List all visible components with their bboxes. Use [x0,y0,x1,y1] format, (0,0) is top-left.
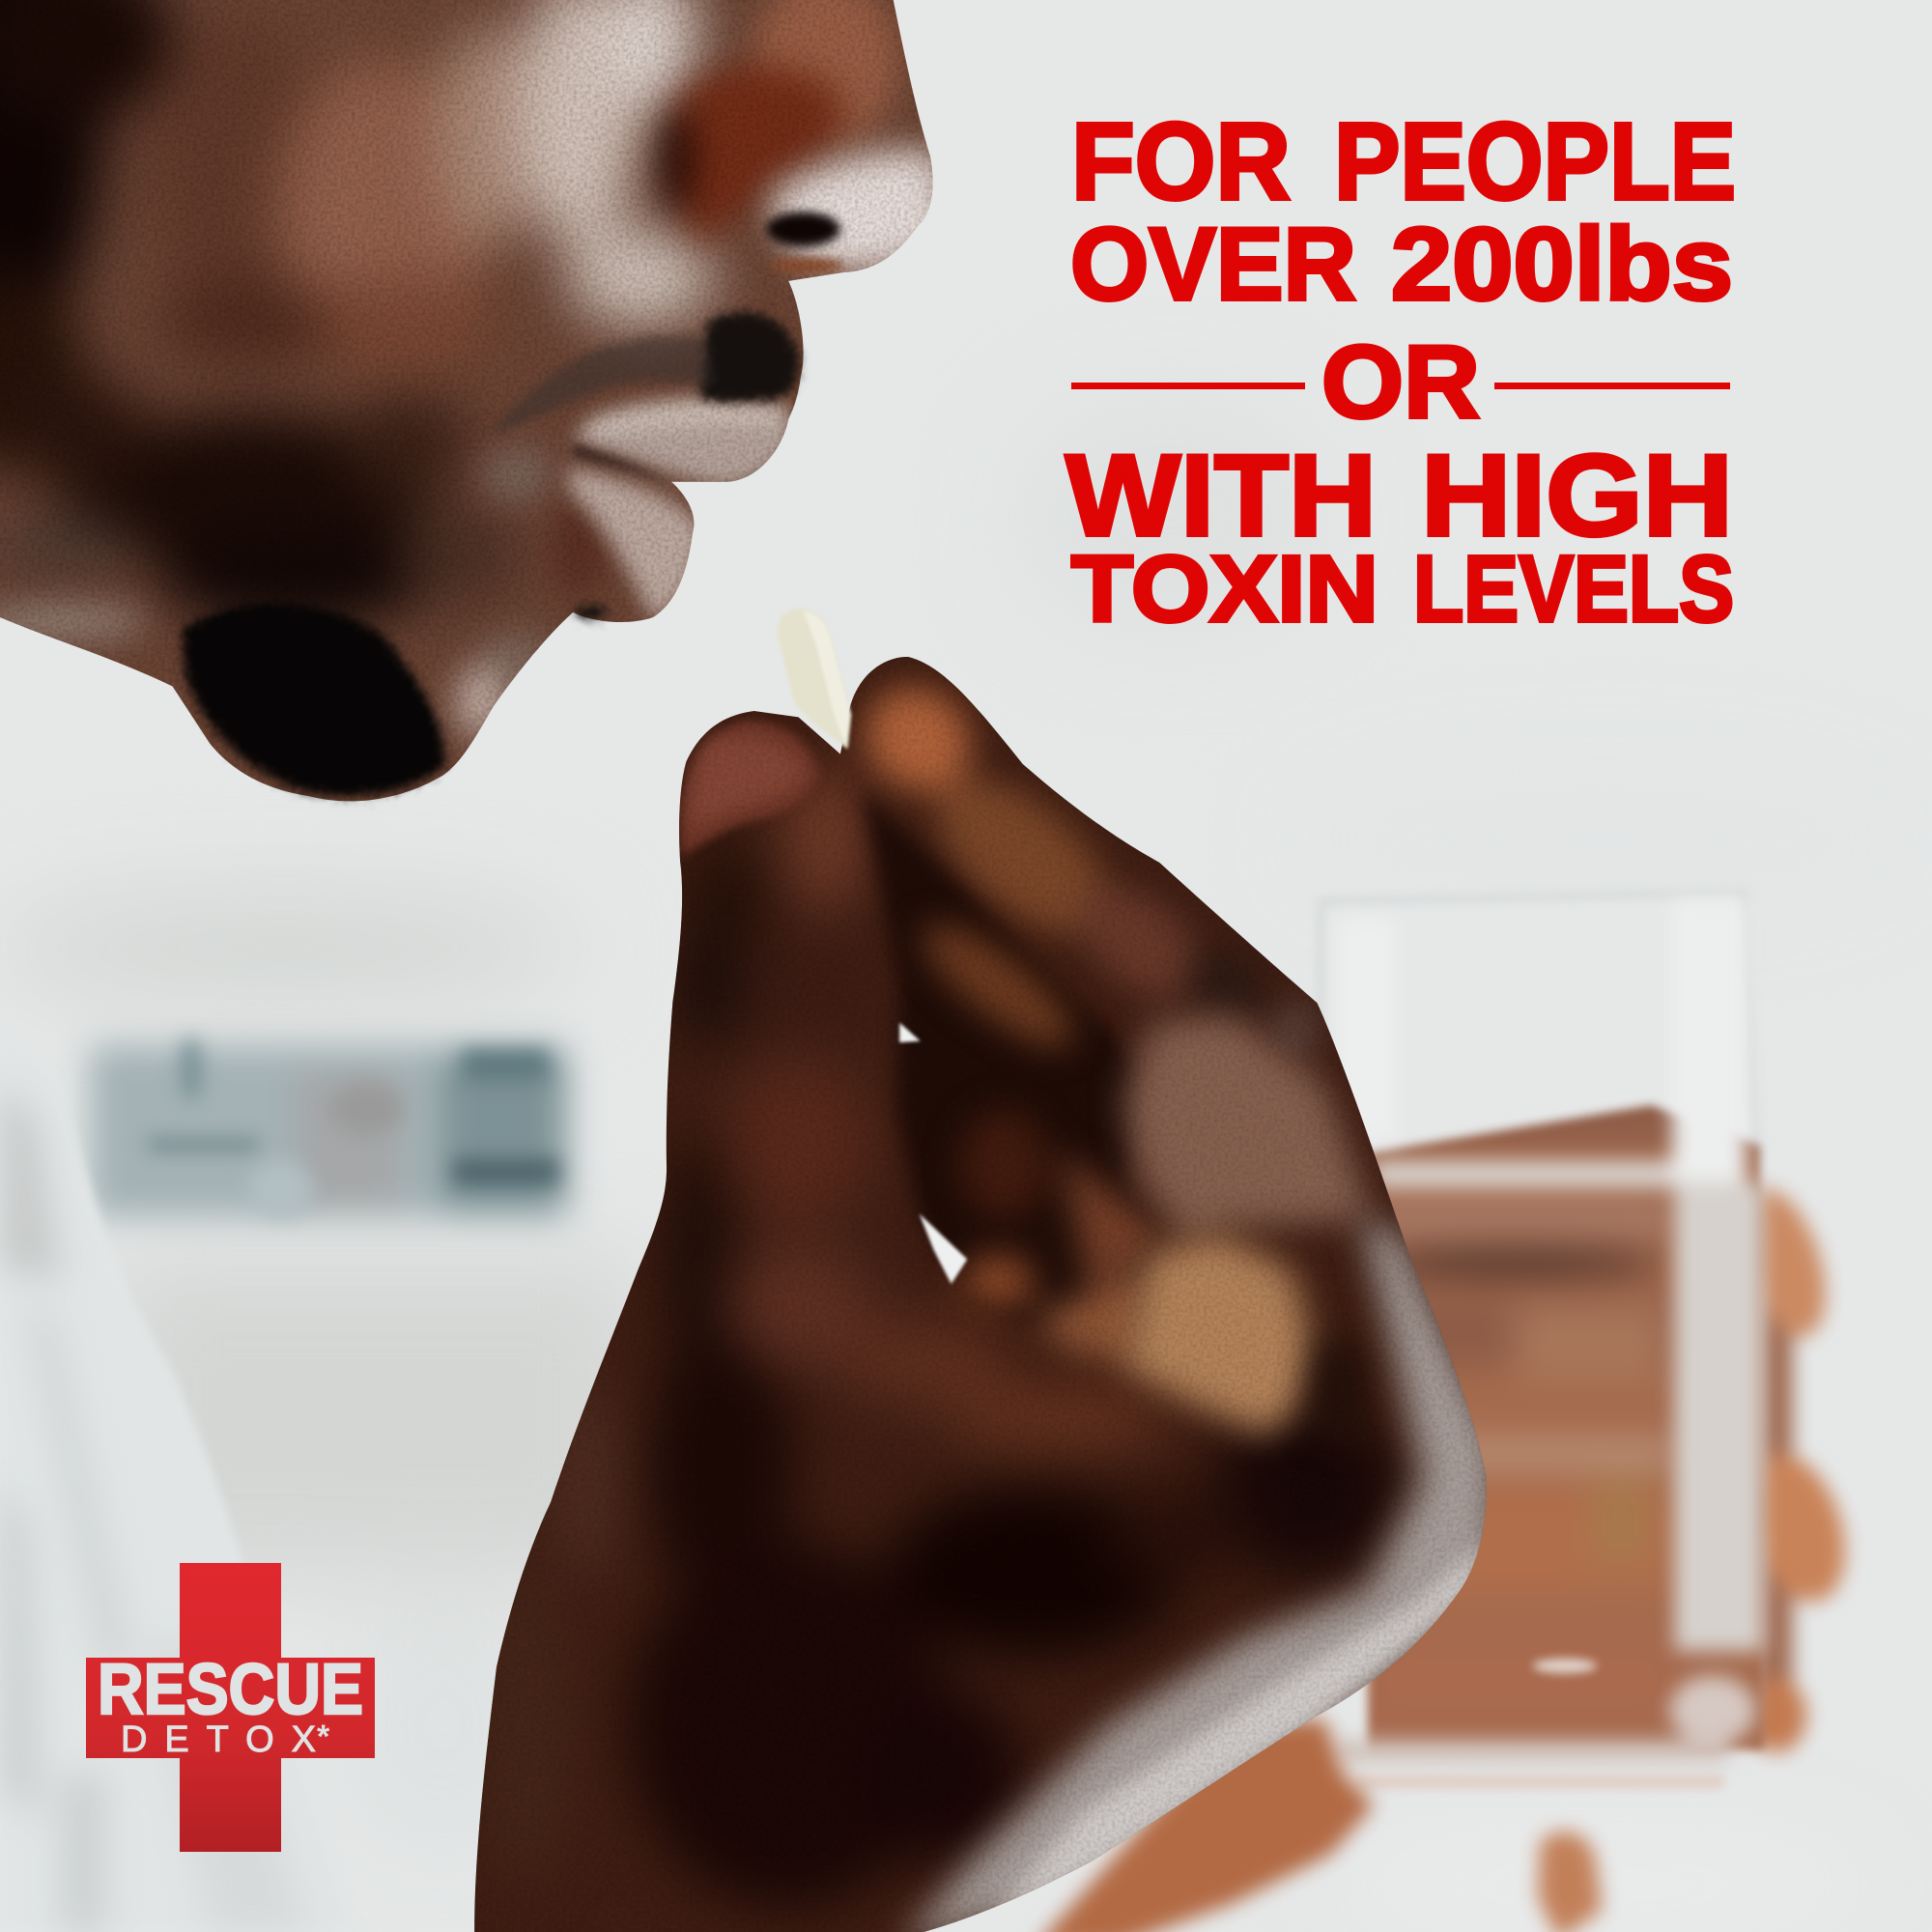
red cross [86,1563,375,1852]
blurred glass with water [1321,894,1862,1789]
headline line: toxin levels: LEVELS [1413,536,1734,641]
shirt [0,1030,357,1932]
headline line: for people: PEOPLE [1334,100,1736,222]
silver sunlit edge of hand [899,1220,1497,1932]
knuckle pad [1123,1015,1374,1244]
hand tones [480,764,1399,1910]
capsule held between fingers [778,609,851,750]
crease under pad [1305,1332,1369,1440]
gaps between fingers [899,1023,967,1284]
curled fingers inside the cavity [907,905,1171,1361]
headline line: with high [1065,431,1733,560]
nose [661,0,899,244]
headline line: over 200lbs [1070,206,1733,322]
headline line: toxin levels: TOXIN [1071,536,1378,641]
nostril [766,212,840,246]
logo word: rescue: RESCUE [98,1649,363,1729]
skin tones [0,0,715,629]
chin beard [183,603,609,796]
hand holding capsule [469,640,1503,1932]
index finger [843,666,1319,1059]
thumb nail [681,721,818,856]
glass outline [1321,894,1756,1158]
headline word: or: OR [1321,324,1480,440]
headline line: with high: WITH [1065,431,1377,560]
logo word: detox: DETOX [121,1719,316,1760]
headline line: for people [1071,100,1736,222]
moustache [493,312,799,434]
brand logo [86,1563,375,1852]
right rule beside or [1494,383,1730,389]
headline line: over 200lbs: OVER [1070,206,1356,322]
logo asterisk: * [317,1719,330,1755]
blurred objects on shelf [89,1045,569,1217]
headline line: toxin levels [1071,536,1734,641]
water body [1355,1084,1775,1749]
fingers behind glass, right side [1724,1179,1862,1752]
blurred wall tone [0,394,1910,1932]
headline line: with high: HIGH [1421,431,1733,560]
face in profile [0,0,961,826]
folded fingertip pad [1123,1235,1324,1435]
headline [1065,100,1736,641]
headline line: for people: FOR [1071,100,1291,222]
headline line: over 200lbs: 200lbs [1391,206,1733,322]
blurred supporting hand below glass [1035,1719,1602,1932]
left rule beside or [1071,383,1305,389]
skin texture [469,640,1503,1932]
lips [569,399,795,622]
shadowed cavity between thumb and fingers [863,788,1171,1331]
skin pore texture [0,0,961,826]
glass surface and side reflections [1337,899,1763,1762]
